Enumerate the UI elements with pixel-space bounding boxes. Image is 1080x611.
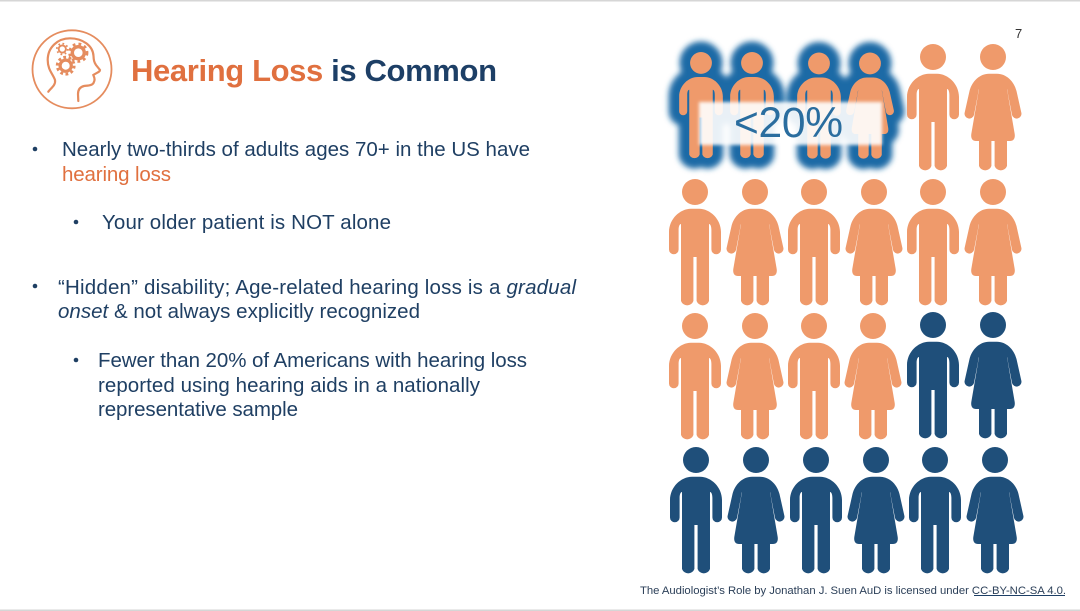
bullet: two-thirds of adults: hearing loss bbox=[62, 163, 171, 186]
icon: head with gears bbox=[32, 30, 112, 108]
sub-bullet: not alone: Your older patient is NOT alone bbox=[102, 211, 391, 234]
callout: less than 20 percent bbox=[699, 100, 882, 147]
pictogram: row 1 highlighted figures glow bbox=[679, 52, 894, 159]
pictogram: row 3 bbox=[669, 312, 1021, 439]
bullet: hidden disability: “Hidden” disability; Age-related hearing loss is a gradual bbox=[58, 276, 577, 299]
sub-bullet: fewer than 20%: reported using hearing aids in a nationally bbox=[98, 374, 481, 397]
sub-bullet: fewer than 20% bbox=[74, 349, 527, 421]
pictogram: row 4 bbox=[670, 447, 1023, 573]
text block: bullet points bbox=[33, 138, 577, 421]
sub-bullet: fewer than 20%: Fewer than 20% of Americans with hearing loss bbox=[98, 349, 527, 372]
bullet: hidden disability: onset & not always explicitly recognized bbox=[58, 300, 420, 323]
bullet: hidden disability bbox=[33, 276, 577, 323]
sub-bullet: fewer than 20%: representative sample bbox=[98, 398, 298, 421]
pictogram: row 1 bbox=[679, 44, 1021, 170]
attribution footnote: The Audiologist’s Role by Jonathan J. Suen AuD is licensed under CC-BY-NC-SA 4.0. bbox=[640, 585, 1066, 597]
pictogram: row 2 bbox=[669, 179, 1021, 305]
callout: less than 20 percent: <20% bbox=[734, 100, 843, 147]
bullet: two-thirds of adults bbox=[33, 138, 530, 186]
title: Hearing Loss is Common bbox=[131, 53, 497, 88]
page number: 7 bbox=[1015, 26, 1022, 41]
bullet: two-thirds of adults: Nearly two-thirds of adults ages 70+ in the US have bbox=[62, 138, 530, 161]
